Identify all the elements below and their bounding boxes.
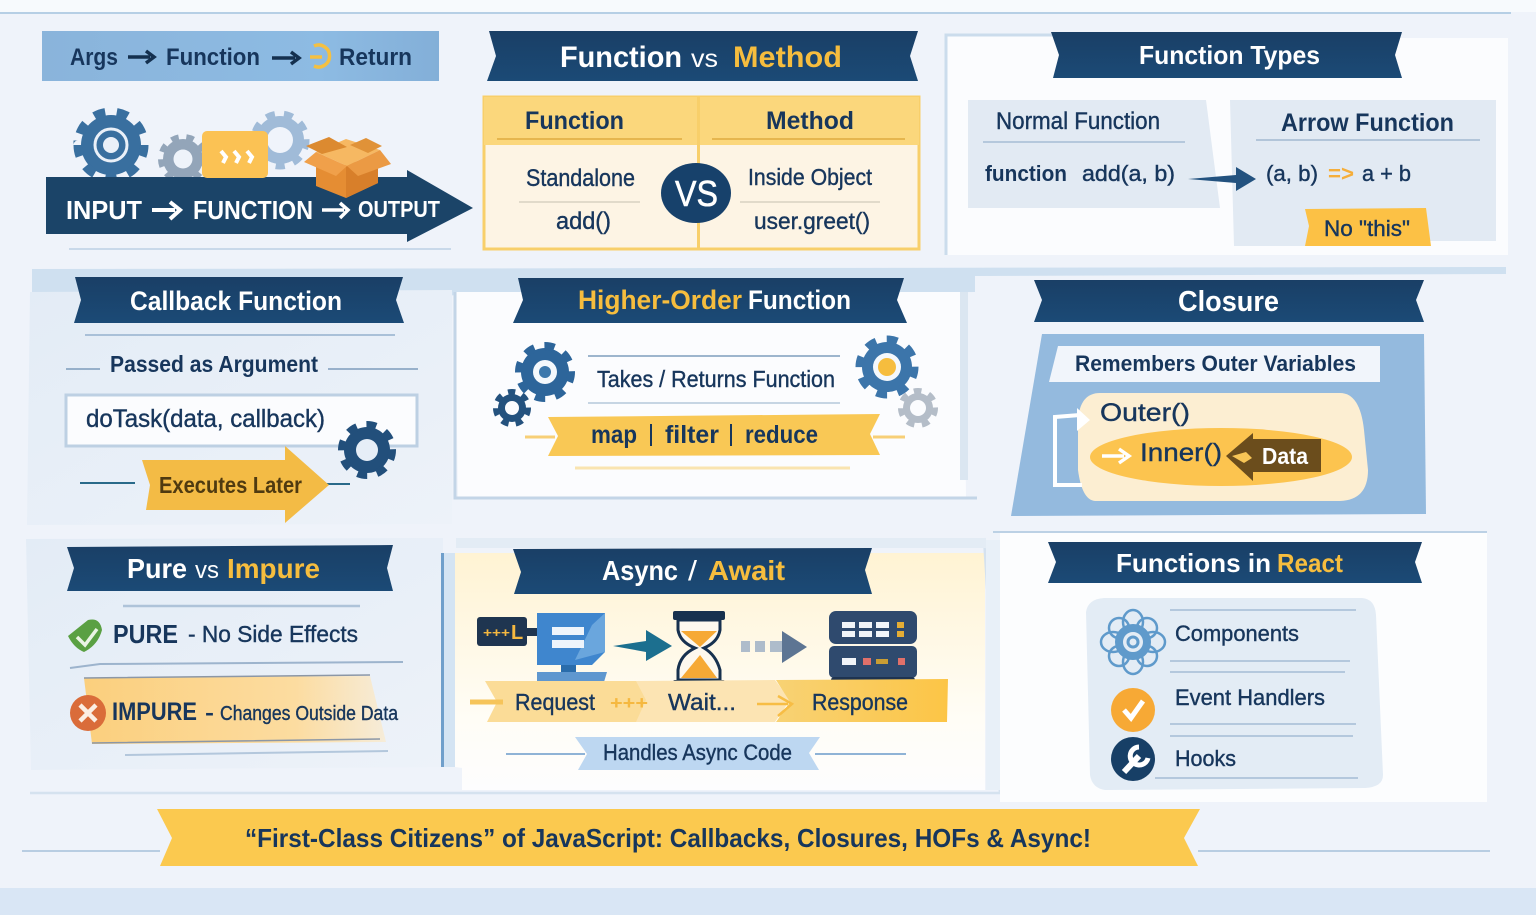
takes returns text: Takes / Returns Function [597, 366, 835, 392]
outer scope: Outer() [1100, 399, 1190, 427]
heading banner: Impure [227, 553, 320, 584]
impure row: - [205, 702, 214, 725]
arrow function card [1230, 100, 1496, 246]
icon: computer [537, 613, 607, 682]
args flow bar: Function [166, 44, 260, 71]
panel: closure [1011, 280, 1426, 516]
heading banner: Function [748, 285, 851, 315]
panel: function vs method [484, 31, 919, 249]
normal function card: Normal Function [996, 108, 1160, 135]
icon: open box [304, 137, 391, 198]
map filter reduce ribbon: map [591, 421, 637, 449]
panel: async await [30, 538, 1000, 793]
arrow: dashed response [741, 631, 807, 663]
VS badge: VS [675, 173, 718, 214]
heading banner: Await [708, 555, 785, 586]
icon: terminal: +++ [483, 625, 510, 640]
arrow function card: a + b [1362, 161, 1411, 186]
heading banner: vs [195, 557, 219, 584]
icon: hourglass [673, 611, 725, 688]
no this badge: No "this" [1324, 216, 1410, 241]
heading banner [513, 548, 872, 594]
arrow function card: => [1328, 161, 1354, 186]
request wait response ribbon: Response [812, 689, 908, 715]
handles async code ribbon: Handles Async Code [603, 740, 792, 765]
icon: gear small left [496, 392, 528, 424]
icon: check circle [1111, 688, 1155, 732]
args flow bar [42, 31, 439, 81]
remembers label: Remembers Outer Variables [1075, 351, 1356, 376]
comparison table: Method [766, 107, 854, 135]
heading banner [1048, 542, 1422, 583]
executes later arrow [80, 446, 350, 523]
flow arrow banner [46, 170, 473, 242]
icon: gear small right [901, 391, 935, 425]
arrow function card: (a, b) [1266, 161, 1318, 186]
panel: callback function [27, 277, 452, 525]
no this badge [1305, 208, 1431, 246]
underline [69, 248, 451, 250]
panel: higher-order function [455, 278, 977, 498]
handles async code ribbon [506, 737, 906, 770]
comparison table: Function [525, 107, 624, 135]
heading banner [67, 545, 393, 591]
icon: blue gear [78, 112, 144, 178]
heading banner [487, 31, 918, 81]
VS badge [661, 163, 731, 223]
heading banner: vs [691, 45, 718, 73]
map filter reduce ribbon: filter [665, 421, 719, 449]
footer ribbon: “First-Class Citizens” of JavaScript: Callbacks, Closures, HOFs & Async! [245, 823, 1091, 853]
panel: pure vs impure [26, 538, 443, 770]
icon: components flower [1101, 610, 1165, 674]
heading banner: Pure [127, 553, 187, 584]
heading banner [74, 277, 404, 323]
normal function card: add(a, b) [1082, 161, 1175, 186]
comparison table: Standalone [526, 165, 635, 192]
passed as argument: Passed as Argument [110, 351, 318, 377]
code box: doTask(data, callback) [86, 405, 325, 433]
request wait response ribbon: +++ [610, 693, 648, 713]
arrow: request [613, 630, 672, 661]
request wait response ribbon: Wait... [668, 689, 736, 715]
heading banner: Function [560, 41, 682, 74]
data arrow: Data [1262, 443, 1308, 469]
remembers label [1049, 346, 1380, 382]
icon: light blue gear [254, 114, 306, 166]
args flow bar: Return [339, 44, 412, 71]
flow arrow banner: OUTPUT [358, 196, 440, 222]
heading banner: Method [733, 41, 842, 74]
map filter reduce ribbon [525, 414, 905, 468]
request wait response ribbon [470, 679, 948, 722]
code box [66, 395, 417, 446]
impure row [70, 675, 399, 744]
icon: terminal [477, 617, 537, 646]
normal function card: function [985, 161, 1067, 186]
heading banner: Higher-Order [578, 285, 742, 315]
pure row [68, 619, 358, 652]
react list card [1086, 598, 1383, 790]
icon: grey gear [161, 137, 205, 181]
flow arrow banner: INPUT [66, 195, 142, 225]
comparison table [484, 97, 919, 249]
icon: yellow function block [202, 131, 268, 178]
heading banner: React [1277, 548, 1343, 578]
heading banner: Closure [1178, 286, 1279, 318]
footer ribbon [22, 809, 1490, 866]
impure row: Changes Outside Data [220, 703, 399, 725]
map filter reduce ribbon: reduce [745, 421, 818, 449]
normal function card [968, 100, 1220, 208]
pure row: PURE [113, 619, 178, 649]
comparison table: add() [556, 208, 611, 235]
react list card: Hooks [1175, 746, 1236, 771]
heading banner [1051, 32, 1402, 78]
icon: gear [342, 425, 392, 475]
icon: wrench circle [1111, 737, 1155, 781]
data arrow [1226, 433, 1321, 481]
react list card: Event Handlers [1175, 685, 1325, 710]
comparison table: Inside Object [748, 164, 873, 190]
outer scope [1078, 393, 1368, 501]
icon: gear large left [519, 346, 571, 398]
heading banner: Callback Function [130, 286, 342, 316]
blue container [1011, 334, 1426, 516]
executes later arrow: Executes Later [159, 472, 302, 498]
heading banner [513, 278, 907, 323]
comparison table: user.greet() [754, 208, 870, 234]
args flow bar: Args [70, 44, 118, 71]
icon: gear large right [860, 340, 914, 394]
inner scope [1090, 428, 1352, 486]
pure row: - No Side Effects [188, 621, 358, 647]
panel: functions in react [993, 532, 1487, 802]
inner scope: Inner() [1140, 439, 1222, 467]
icon: terminal: L [511, 622, 523, 644]
panel: function flow [42, 31, 473, 250]
request wait response ribbon: Request [515, 689, 596, 715]
arrow function card: Arrow Function [1281, 109, 1454, 137]
heading banner: / [688, 555, 697, 586]
loop arrow [1055, 408, 1090, 485]
heading banner: Function Types [1139, 40, 1320, 70]
icon: server [829, 611, 917, 683]
arrow: normal to arrow [1188, 167, 1256, 191]
heading banner: Functions in [1116, 548, 1271, 578]
band: row 2 top strip [32, 267, 1506, 298]
heading banner: Async [602, 555, 678, 586]
flow arrow banner: FUNCTION [193, 195, 313, 225]
react list card: Components [1175, 621, 1299, 646]
impure row: IMPURE [112, 698, 197, 726]
heading banner [1034, 280, 1424, 322]
panel: function types [946, 32, 1508, 255]
